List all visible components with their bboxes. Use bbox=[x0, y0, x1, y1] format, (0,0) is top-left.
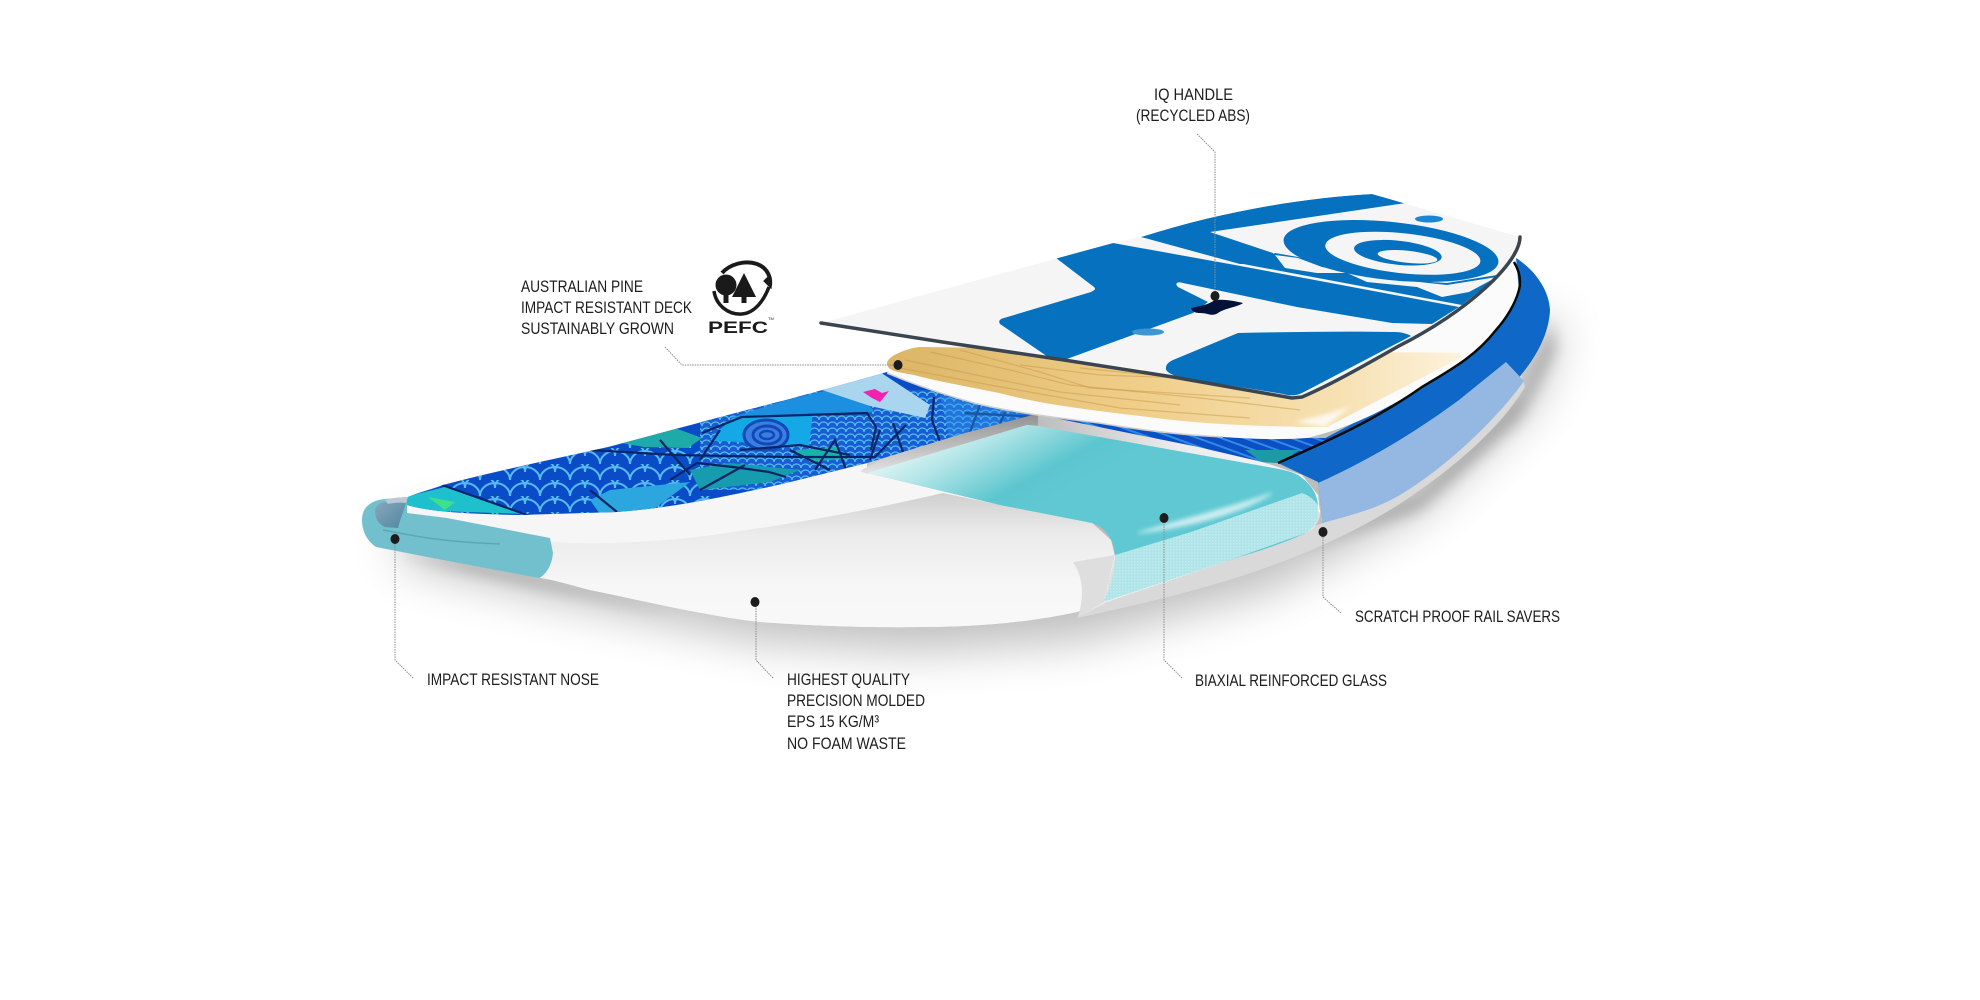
artwork: nose panel bbox=[400, 487, 525, 514]
pad: dark edge bbox=[821, 237, 1520, 398]
label: foam core: PRECISION MOLDED bbox=[787, 692, 925, 710]
translucent glass band over rail bbox=[1318, 362, 1524, 523]
glass mesh wrap bbox=[1073, 493, 1320, 617]
wood highlight bbox=[1295, 405, 1352, 427]
pad: large blue H graphic bbox=[999, 243, 1459, 361]
pine wood layer bbox=[887, 347, 1462, 427]
artwork: cyan shell panel bbox=[710, 416, 812, 446]
deck pad bbox=[821, 194, 1520, 398]
white layer soft edge bbox=[887, 373, 1223, 437]
teal accent in right artwork bbox=[1245, 450, 1300, 463]
pad: logo white wave bbox=[1275, 255, 1497, 297]
pad: lower logo stripe bbox=[1238, 253, 1506, 305]
teal nose bbox=[362, 497, 553, 578]
lower nose line bbox=[383, 530, 500, 544]
pad: lower blue patch bbox=[1166, 332, 1411, 395]
label: foam core bbox=[787, 671, 925, 753]
pad: small logo top bbox=[1415, 216, 1443, 222]
glass reflection streak bbox=[1138, 493, 1272, 533]
glass mesh edge bbox=[1073, 555, 1115, 617]
pad: small logo centre bbox=[1132, 328, 1164, 336]
artwork: dark line work bbox=[442, 397, 1036, 516]
artwork: pale heart panel bbox=[822, 372, 930, 418]
artwork: fine pattern bbox=[700, 390, 1050, 490]
drop shadow bbox=[390, 320, 1562, 650]
label: Australian pine deck bbox=[521, 278, 692, 338]
label: IQ handle bbox=[1136, 86, 1250, 125]
foam core bbox=[362, 463, 1115, 627]
rail strip: scratch proof rail savers bbox=[1077, 373, 1525, 618]
artwork: spiral bbox=[744, 420, 788, 450]
deck artwork bbox=[400, 370, 1050, 520]
artwork: mid teal accent bbox=[795, 447, 850, 462]
label: scratch proof rail savers: SCRATCH PROOF RAIL SAVERS bbox=[1355, 608, 1560, 626]
blue outer rail bbox=[1278, 258, 1550, 523]
board illustration bbox=[362, 194, 1550, 627]
label: impact resistant nose: IMPACT RESISTANT NOSE bbox=[427, 671, 599, 689]
board construction infographic bbox=[362, 88, 1575, 749]
label: IQ handle: IQ HANDLE bbox=[1154, 86, 1233, 104]
black deck line bbox=[1278, 262, 1520, 463]
grey cut wall left bbox=[860, 413, 1040, 474]
callout dots bbox=[390, 291, 1328, 607]
white deck layer bbox=[887, 258, 1519, 439]
artwork: right deck tint bbox=[940, 395, 1032, 438]
artwork: green nose accent bbox=[428, 497, 455, 510]
foam recessed shading bbox=[541, 493, 1115, 627]
icon: PEFC logo bbox=[708, 262, 774, 337]
callout leader lines bbox=[395, 134, 1341, 678]
label: foam core: HIGHEST QUALITY bbox=[787, 671, 910, 689]
artwork: lower teal bbox=[690, 463, 800, 490]
label: Australian pine deck: IMPACT RESISTANT DECK bbox=[521, 299, 692, 317]
pad: upper blue band bbox=[1141, 194, 1404, 264]
artwork: lower pale band bbox=[590, 482, 690, 514]
artwork on right side of cutaway bbox=[1040, 415, 1336, 463]
pad: spiral logo bbox=[1284, 220, 1498, 282]
heart bbox=[863, 389, 889, 402]
label: Australian pine deck: SUSTAINABLY GROWN bbox=[521, 320, 674, 338]
artwork: upper cyan panel bbox=[730, 391, 875, 418]
wood grain bbox=[900, 350, 1340, 418]
silver nose tip bbox=[385, 497, 408, 504]
nose protector bbox=[362, 497, 553, 578]
label: foam core: NO FOAM WASTE bbox=[787, 735, 906, 753]
artwork: wave scales bbox=[450, 440, 710, 516]
dark nose inset bbox=[375, 500, 407, 528]
label: Australian pine deck: AUSTRALIAN PINE bbox=[521, 278, 643, 296]
label: biaxial reinforced glass: BIAXIAL REINFORCED GLASS bbox=[1195, 672, 1387, 690]
label: IQ handle: (RECYCLED ABS) bbox=[1136, 107, 1250, 125]
foam wall right bbox=[1038, 415, 1320, 513]
icon: PEFC logo: PEFC bbox=[708, 318, 768, 337]
biaxial glass teal layer bbox=[867, 425, 1318, 602]
IQ handle bbox=[1191, 300, 1243, 315]
label: foam core: EPS 15 KG/M³ bbox=[787, 713, 879, 731]
artwork: teal shapes bbox=[621, 428, 702, 448]
icon: PEFC logo: TM bbox=[768, 316, 774, 321]
